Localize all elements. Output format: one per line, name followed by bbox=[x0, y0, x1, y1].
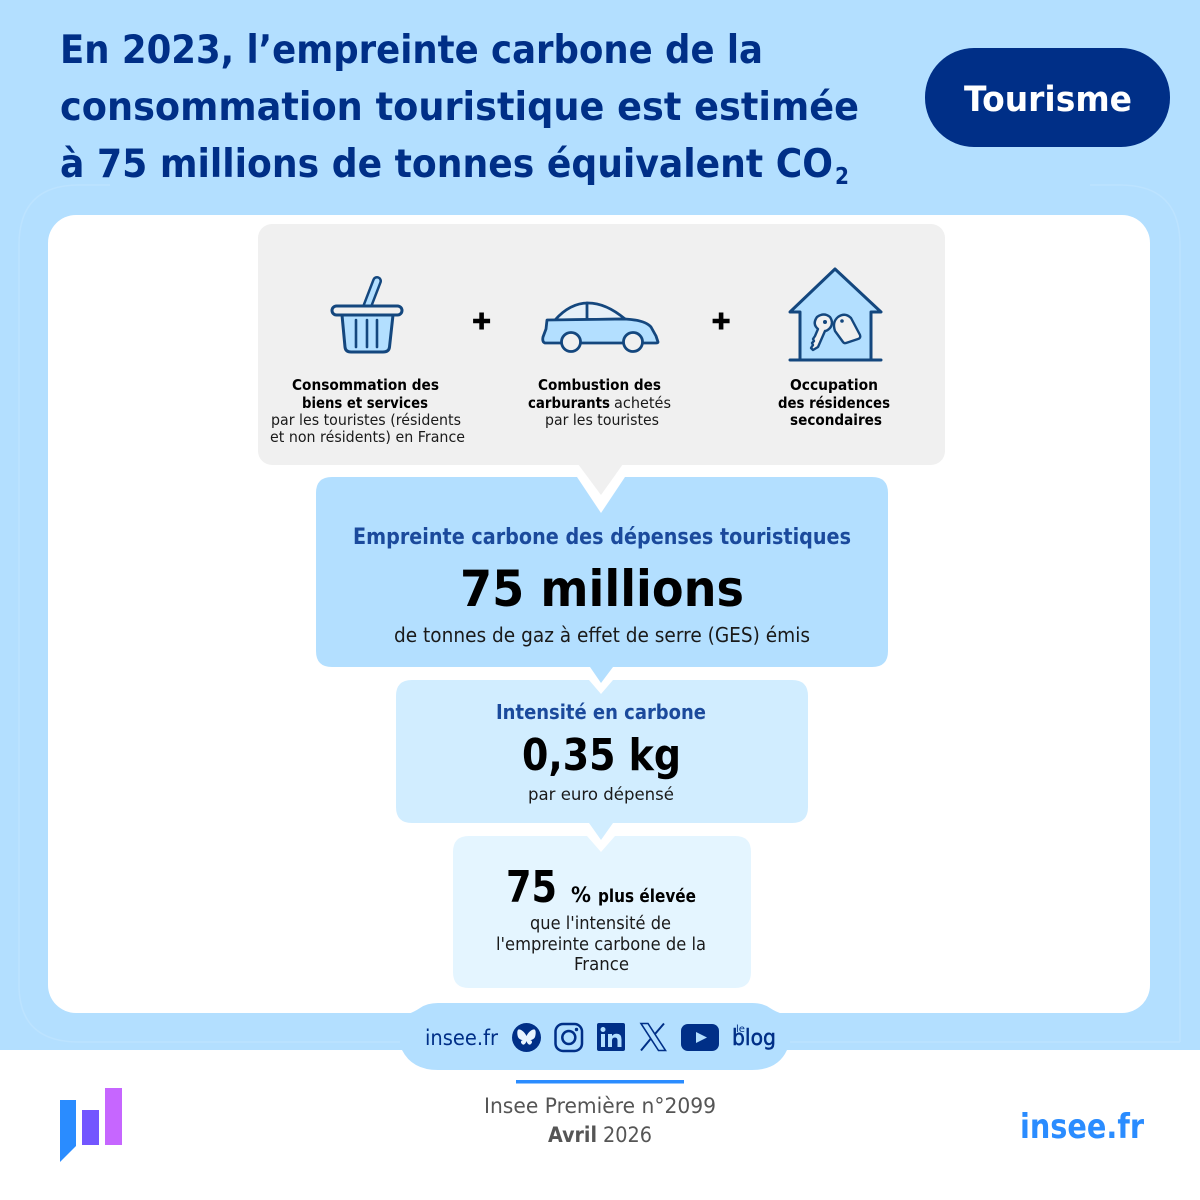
text: consumption of goods and services bbox=[270, 376, 465, 446]
panel: 75 percent higher: % bbox=[571, 883, 591, 907]
logo: Insee bars bbox=[60, 1088, 122, 1162]
panel: 75 percent higher: plus élevée bbox=[598, 886, 696, 907]
panel: carbon footprint 75 millions: Empreinte carbone des dépenses touristiques bbox=[353, 525, 851, 550]
panel: sources of emissions bbox=[258, 224, 945, 495]
panel: carbon footprint 75 millions: 75 millions bbox=[460, 560, 744, 618]
text: consumption of goods and services: biens et services bbox=[302, 394, 428, 412]
panel: 75 percent higher: 75 bbox=[506, 862, 557, 913]
panel: 75 percent higher: que l'intensité de bbox=[530, 913, 671, 934]
title bbox=[60, 28, 859, 190]
title: consommation touristique est estimée bbox=[60, 85, 859, 130]
icon: plus bbox=[473, 312, 490, 330]
publication reference: Avril bbox=[548, 1123, 597, 1147]
text: fuel combustion: carburants bbox=[528, 394, 610, 412]
accent line bbox=[516, 1080, 684, 1084]
badge: Tourisme bbox=[925, 48, 1170, 147]
panel: carbon intensity: Intensité en carbone bbox=[496, 700, 706, 724]
text: fuel combustion bbox=[528, 376, 671, 429]
panel: 75 percent higher: France bbox=[574, 954, 629, 975]
social media bar bbox=[402, 1003, 787, 1070]
title: En 2023, l’empreinte carbone de la bbox=[60, 28, 763, 73]
badge: Tourisme: Tourisme bbox=[964, 80, 1132, 120]
publication reference: 2026 bbox=[603, 1123, 652, 1147]
icon: le blog: blog bbox=[732, 1026, 776, 1051]
panel: white content card bbox=[48, 215, 1150, 1013]
panel: 75 percent higher: l'empreinte carbone de la bbox=[496, 934, 706, 955]
panel: carbon intensity: par euro dépensé bbox=[528, 785, 674, 805]
panel: 75 percent higher bbox=[453, 836, 751, 988]
text: fuel combustion: par les touristes bbox=[545, 411, 659, 429]
panel: carbon footprint 75 millions: de tonnes de gaz à effet de serre (GES) émis bbox=[394, 623, 810, 647]
text: secondary residences bbox=[778, 376, 890, 429]
icon: bluesky bbox=[512, 1023, 541, 1052]
text: secondary residences: Occupation bbox=[790, 376, 878, 394]
icon: plus bbox=[713, 312, 730, 330]
text: fuel combustion: achetés bbox=[614, 394, 671, 412]
panel: carbon intensity bbox=[396, 680, 808, 840]
icon: house with keys bbox=[790, 269, 881, 360]
title: à 75 millions de tonnes équivalent CO bbox=[60, 142, 833, 187]
text: consumption of goods and services: par les touristes (résidents bbox=[271, 411, 461, 429]
icon: le blog: le bbox=[736, 1024, 745, 1035]
text: fuel combustion: Combustion des bbox=[538, 376, 661, 394]
publication reference: Insee Première n°2099 bbox=[484, 1094, 716, 1118]
icon: car bbox=[543, 303, 658, 352]
title: 2 bbox=[835, 164, 849, 190]
icon: shopping basket bbox=[332, 281, 402, 352]
panel: carbon footprint 75 millions bbox=[316, 477, 888, 683]
icon: X bbox=[641, 1024, 666, 1050]
text: secondary residences: des résidences bbox=[778, 394, 890, 412]
icon: instagram bbox=[556, 1024, 582, 1051]
publication reference bbox=[484, 1094, 716, 1147]
text: consumption of goods and services: et non résidents) en France bbox=[270, 428, 465, 446]
social media bar: insee.fr bbox=[425, 1026, 498, 1050]
text: secondary residences: secondaires bbox=[790, 411, 882, 429]
site link: insee.fr bbox=[1020, 1107, 1144, 1147]
panel: carbon intensity: 0,35 kg bbox=[522, 730, 681, 781]
icon: linkedin bbox=[597, 1023, 625, 1051]
text: consumption of goods and services: Consommation des bbox=[292, 376, 439, 394]
icon: youtube bbox=[681, 1024, 719, 1051]
